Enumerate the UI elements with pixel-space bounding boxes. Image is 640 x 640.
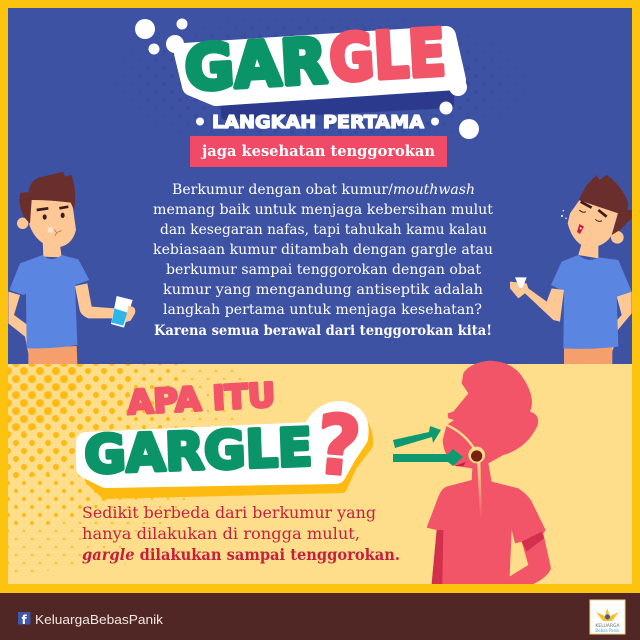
description text: Sedikit berbeda dari berkumur yang	[82, 504, 376, 522]
description text: gargle dilakukan sampai tenggorokan.	[82, 545, 400, 564]
logo: Bebas Panik	[595, 628, 620, 633]
arrow: upper green	[393, 426, 441, 448]
panel: cream bottom section	[8, 364, 632, 584]
body text: kumur yang mengandung antiseptik adalah	[163, 282, 483, 298]
banner: jaga kesehatan tenggorokan	[190, 136, 447, 167]
heading: APA ITU: APA ITU	[126, 375, 276, 422]
footer bar	[0, 593, 640, 640]
arrow: lower green	[393, 449, 463, 466]
icon: facebook	[18, 612, 30, 627]
panel: blue top section	[8, 8, 632, 364]
body text: dan kesegaran nafas, tapi tahukah kamu kalau	[160, 222, 487, 238]
heading: GARGLE? sticker: GARGLE	[83, 418, 313, 486]
title: GARGLE sticker	[183, 17, 456, 116]
body text	[153, 182, 494, 339]
description text	[82, 504, 400, 564]
logo: KELUARGA	[595, 623, 620, 629]
body text: kebiasaan kumur ditambah dengan gargle atau	[153, 242, 493, 258]
body text: memang baik untuk menjaga kebersihan mulut	[153, 202, 494, 218]
body text: Karena semua berawal dari tenggorokan kita!	[154, 323, 492, 339]
bubbles around title	[135, 18, 479, 139]
logo	[590, 600, 625, 634]
banner: jaga kesehatan tenggorokan: jaga kesehatan tenggorokan	[200, 142, 435, 160]
title: GARGLE sticker: GAR	[183, 24, 329, 105]
body text: langkah pertama untuk menjaga kesehatan?	[163, 302, 482, 318]
character: man with glass	[8, 172, 135, 364]
footer handle text: KeluargaBebasPanik	[35, 612, 164, 627]
body text: Berkumur dengan obat kumur/ mouthwash	[172, 182, 475, 198]
subtitle: langkah pertama: LANGKAH PERTAMA	[212, 113, 424, 133]
title: GARGLE sticker: GLE	[327, 17, 447, 97]
heading: GARGLE? sticker	[83, 397, 368, 496]
heading: GARGLE? sticker: ?	[312, 397, 364, 496]
description text: hanya dilakukan di rongga mulut,	[82, 525, 360, 543]
body text: berkumur sampai tenggorokan dengan obat	[166, 262, 482, 278]
icon: facebook: f	[22, 613, 28, 627]
diagram: throat silhouette	[427, 361, 551, 584]
character: man gargling	[510, 175, 632, 364]
